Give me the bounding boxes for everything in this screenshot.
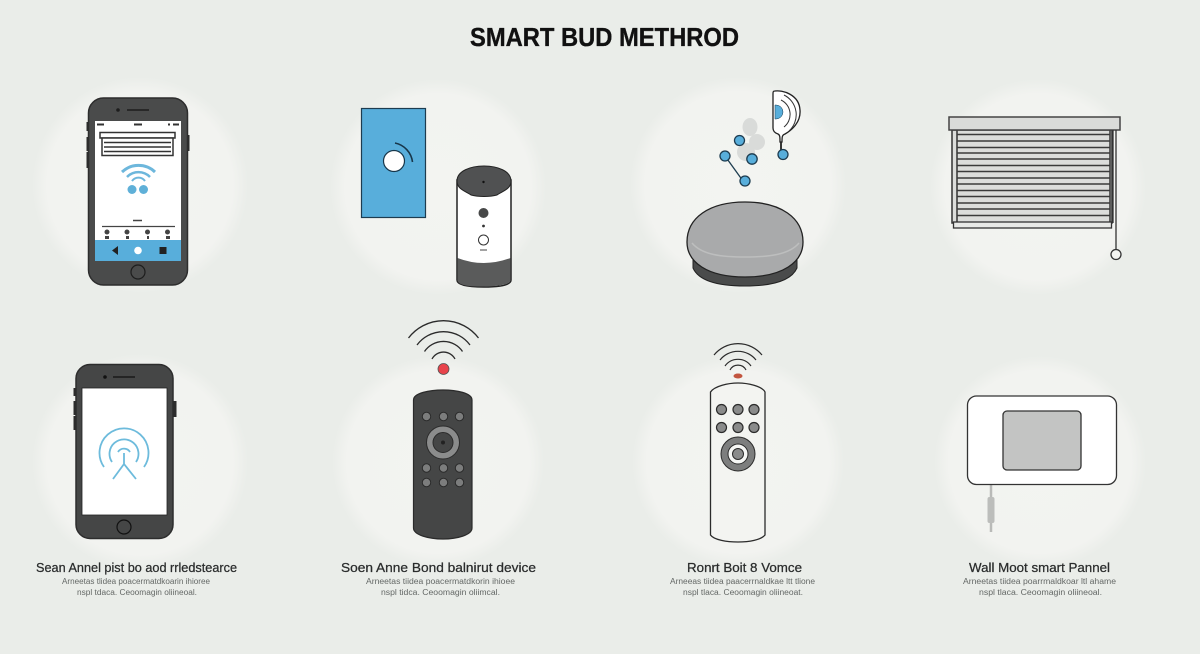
caption: dark remote: Arneetas tiidea poacermatdkorin ihioee xyxy=(366,577,516,586)
caption: white remote: Ronrt Boit 8 Vomce xyxy=(687,560,802,575)
phone screen xyxy=(82,388,167,515)
panel: smart speaker with nodes xyxy=(687,91,803,286)
home button xyxy=(117,520,131,534)
caption: white remote xyxy=(670,560,816,597)
caption: white remote: nspl tlaca. Ceoomagin oliineoat. xyxy=(683,588,803,597)
caption: wall panel: Wall Moot smart Pannel xyxy=(969,560,1110,575)
button grid xyxy=(716,404,759,432)
panel: wall switch and smart speaker xyxy=(362,108,511,287)
caption: dark remote xyxy=(341,560,536,597)
blinds on screen xyxy=(100,132,175,156)
bottom rail xyxy=(954,222,1112,228)
node links xyxy=(725,156,743,181)
caption: dark remote: nspl tidca. Ceoomagin oliimcal. xyxy=(381,588,500,597)
speaker and camera xyxy=(116,108,149,112)
cable xyxy=(988,485,994,532)
lower buttons xyxy=(422,464,464,487)
caption: wall panel: Arneetas tiidea poarrmaldkoar ltl ahame xyxy=(963,577,1117,586)
phone side buttons xyxy=(88,122,188,168)
signal arcs xyxy=(408,321,478,359)
caption: wall panel xyxy=(963,560,1117,597)
panel: dark remote xyxy=(408,321,478,539)
pale cloud xyxy=(737,118,765,161)
remote body xyxy=(710,383,765,542)
pull cord xyxy=(1111,130,1121,260)
blue nav bar xyxy=(95,240,181,261)
caption: phone: Sean Annel pist bo aod rrledstearce xyxy=(36,560,237,575)
blue nodes xyxy=(720,136,788,186)
d-pad xyxy=(426,426,460,459)
nav buttons xyxy=(112,246,166,255)
top buttons xyxy=(422,412,464,421)
signal arcs xyxy=(714,344,762,370)
cylinder speaker xyxy=(457,166,511,287)
round speaker xyxy=(687,202,803,286)
round switch xyxy=(384,150,404,172)
phone body xyxy=(88,98,188,285)
caption: phone xyxy=(36,560,237,597)
caption: phone: nspl tdaca. Ceoomagin oliineoal. xyxy=(77,588,197,597)
led xyxy=(734,374,742,378)
remote body xyxy=(414,390,472,539)
top housing xyxy=(949,117,1120,130)
caption: phone: Arneetas tlidea poacermatdkoarin ihioree xyxy=(62,577,211,586)
speaker and camera xyxy=(103,375,135,379)
panel frame xyxy=(968,396,1116,484)
panel: white remote xyxy=(710,344,765,542)
antenna icon xyxy=(99,428,148,479)
red led xyxy=(438,364,449,374)
title: SMART BUD METHROD xyxy=(470,22,739,52)
panel: roller blind xyxy=(949,117,1121,260)
phone body xyxy=(76,364,173,538)
side buttons xyxy=(75,388,175,430)
caption: white remote: Arneeas tiidea paacerrnaldkae ltt tlione xyxy=(670,577,816,586)
sensor tag xyxy=(773,91,800,150)
panel: phone with blinds app xyxy=(88,98,188,285)
d-pad xyxy=(721,437,755,471)
caption: wall panel: nspl tlaca. Ceoomagin oliineoal. xyxy=(979,588,1102,597)
two blue dots xyxy=(128,185,148,194)
blue wall panel xyxy=(362,108,426,218)
panel: wall mount panel xyxy=(968,396,1116,532)
status bar xyxy=(97,124,179,126)
home button xyxy=(131,265,145,279)
wifi symbol xyxy=(122,165,155,181)
blind slats xyxy=(952,130,1112,223)
toolbar glyphs xyxy=(102,220,175,239)
panel: phone with antenna xyxy=(75,364,175,538)
panel display xyxy=(1003,411,1081,470)
signal arc xyxy=(395,143,412,162)
caption: dark remote: Soen Anne Bond balnirut device xyxy=(341,560,536,575)
phone screen xyxy=(95,121,181,261)
